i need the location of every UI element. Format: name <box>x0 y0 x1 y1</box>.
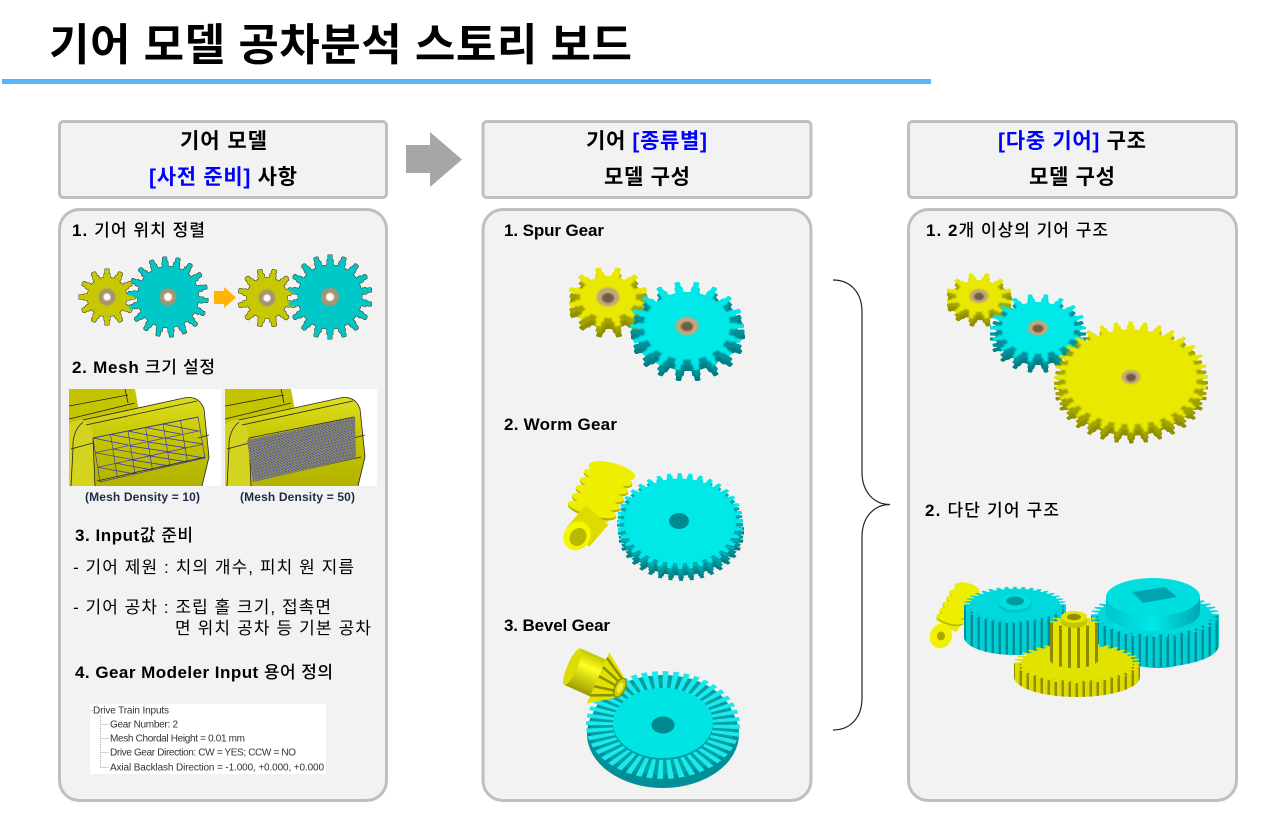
image: mesh density 50 <box>225 389 377 486</box>
icon: bevel gear <box>556 639 739 788</box>
panel: multi gear header: 모델 구성 <box>1029 166 1115 189</box>
panel: preparation body <box>60 210 386 800</box>
title underline <box>2 79 931 84</box>
bracket: gear types to multi gear <box>833 280 890 730</box>
heading: two or more gears: 1. 2개 이상의 기어 구조 <box>926 221 1108 240</box>
heading: bevel gear: 3. Bevel Gear <box>504 616 610 635</box>
icon: multi-stage gear train <box>926 578 1219 697</box>
text: gear tolerance <box>73 598 371 638</box>
panel: multi gear body <box>908 210 1236 800</box>
icon: three meshed gears <box>942 270 1205 441</box>
arrow: header flow <box>406 132 462 187</box>
heading: input values: 3. Input값 준비 <box>75 526 193 545</box>
caption: density 10: (Mesh Density = 10) <box>85 490 200 504</box>
text: gear tolerance: 면 위치 공차 등 기본 공차 <box>175 619 371 638</box>
title: 기어 모델 공차분석 스토리 보드 <box>49 21 632 70</box>
panel: preparation header: 기어 모델 <box>180 130 267 153</box>
icon: gears before alignment <box>81 257 208 337</box>
text: gear tolerance: - 기어 공차 : 조립 홀 크기, 접촉면 <box>73 598 331 617</box>
panel: gear types header: 모델 구성 <box>604 166 690 189</box>
icon: worm gear <box>558 457 742 579</box>
screenshot: drive train inputs tree: Axial Backlash Direction = -1.000, +0.000, +0.000 <box>110 762 324 774</box>
screenshot: drive train inputs tree: Mesh Chordal Height = 0.01 mm <box>110 734 245 744</box>
heading: mesh size: 2. Mesh 크기 설정 <box>72 358 215 377</box>
screenshot: drive train inputs tree <box>90 704 326 774</box>
panel: multi gear header: [다중 기어] 구조 <box>998 130 1146 153</box>
icon: gears after alignment <box>235 252 375 342</box>
panel: gear types header: 기어 [종류별] <box>586 130 707 153</box>
panel: gear types header <box>483 122 811 198</box>
panel: preparation header <box>60 122 386 198</box>
arrow: alignment step <box>214 287 236 308</box>
icon: spur gear pair <box>563 263 741 379</box>
panel: preparation header: [사전 준비] 사항 <box>149 166 297 189</box>
image: mesh density 10 <box>69 389 221 486</box>
heading: multi-stage gear: 2. 다단 기어 구조 <box>925 501 1059 520</box>
caption: density 50: (Mesh Density = 50) <box>240 490 355 504</box>
screenshot: drive train inputs tree: Drive Train Inputs <box>93 706 169 716</box>
heading: worm gear: 2. Worm Gear <box>504 415 617 434</box>
panel: gear types body <box>483 210 811 800</box>
heading: gear alignment: 1. 기어 위치 정렬 <box>72 221 205 240</box>
screenshot: drive train inputs tree: Drive Gear Direction: CW = YES; CCW = NO <box>110 748 296 758</box>
text: gear specification: - 기어 제원 : 치의 개수, 피치 원 지름 <box>73 558 354 577</box>
screenshot: drive train inputs tree: Gear Number: 2 <box>110 720 178 730</box>
heading: spur gear: 1. Spur Gear <box>504 221 604 240</box>
panel: multi gear header <box>908 122 1236 198</box>
heading: input terms: 4. Gear Modeler Input 용어 정의 <box>75 663 333 682</box>
